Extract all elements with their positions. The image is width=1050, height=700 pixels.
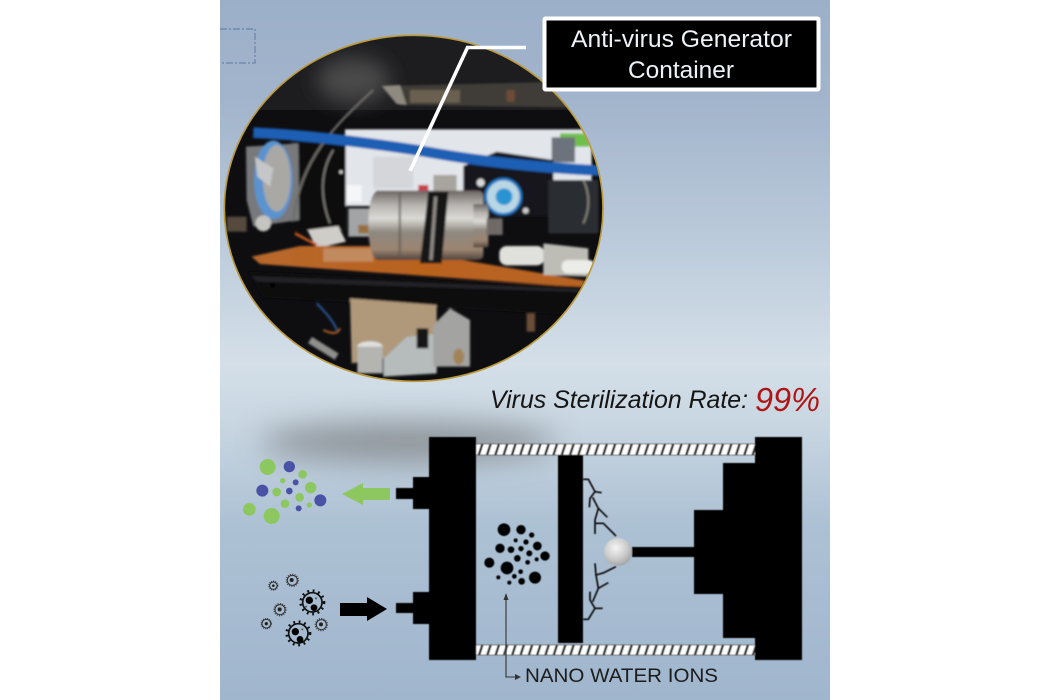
leader arrow to ions (504, 593, 521, 680)
incoming virus particles (261, 574, 327, 645)
photo: generator container in circular lens (220, 30, 610, 387)
top hatched tube (476, 444, 756, 455)
heading: virus sterilization rate: Virus Sterilization Rate: (490, 386, 748, 414)
fan (246, 143, 299, 227)
callout: Anti-virus Generator Container: Anti-virus Generator (571, 26, 792, 53)
callout: Anti-virus Generator Container (544, 18, 818, 90)
blue tube (253, 133, 600, 171)
fittings left (227, 217, 247, 232)
emitter ball (604, 538, 632, 566)
nano water ion cluster (484, 523, 550, 585)
orange board (252, 246, 585, 287)
left black panel (292, 140, 346, 230)
pointer line to container (410, 48, 526, 171)
white fittings (499, 246, 544, 265)
arrow: contaminated air in (340, 597, 387, 621)
label: nano water ions: NANO WATER IONS (525, 665, 718, 687)
left end block with nozzles (396, 437, 476, 660)
diagram: anti-virus generator cross-section (396, 437, 802, 660)
cables (293, 90, 373, 220)
bottom hatched tube (476, 645, 756, 655)
electrical discharge cracks (583, 479, 616, 619)
dashed placeholder box (220, 29, 255, 63)
heading: virus sterilization rate: 99% (755, 381, 820, 418)
arrow: clean air out (342, 483, 390, 505)
background panel (220, 0, 830, 700)
lower compartment (350, 298, 437, 363)
heading: virus sterilization rate (490, 381, 820, 418)
black strap (420, 192, 448, 263)
centre plate (558, 455, 583, 643)
callout: Anti-virus Generator Container: Container (628, 57, 734, 84)
blue ring gauge (486, 179, 521, 214)
diagram shadow (260, 422, 556, 462)
right end block stepped (632, 437, 802, 660)
black right housing (463, 152, 553, 217)
metal cylinder (368, 191, 483, 260)
black shelf (270, 280, 580, 314)
outgoing clean air particles (243, 459, 326, 524)
white window behind machine (345, 129, 592, 206)
